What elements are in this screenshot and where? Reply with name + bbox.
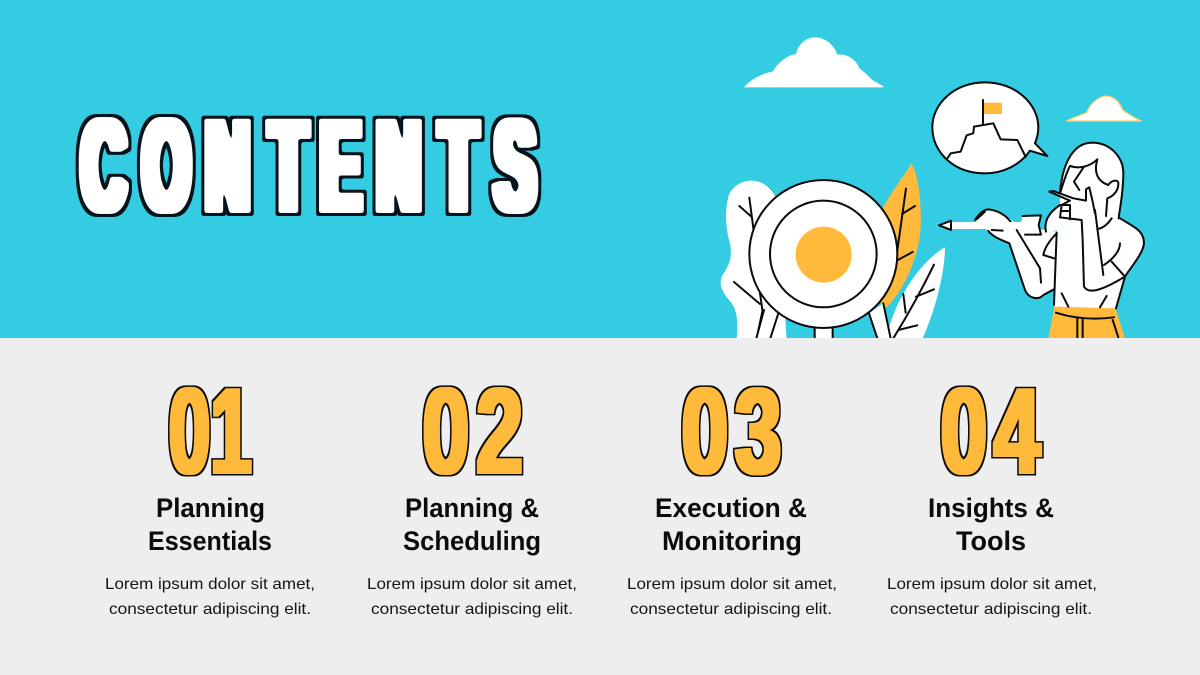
background: sky band <box>0 0 1200 338</box>
illustration <box>721 37 1144 340</box>
skirt details <box>1056 293 1118 337</box>
column 3 <box>627 364 837 618</box>
icon: white leaf <box>887 247 945 340</box>
heading: Tools <box>956 526 1026 556</box>
description: Lorem ipsum dolor sit amet, <box>367 576 577 593</box>
description: consectetur adipiscing elit. <box>890 601 1092 618</box>
number 02: 02 <box>423 364 523 500</box>
icon: thought bubble with mountain and flag <box>932 82 1047 173</box>
icon: small cloud <box>1067 96 1141 121</box>
column 1 <box>105 364 315 618</box>
icon: target <box>749 180 897 328</box>
number 01: 01 <box>169 364 251 500</box>
description: Lorem ipsum dolor sit amet, <box>887 576 1097 593</box>
raised arm and pointing hand <box>1049 187 1125 291</box>
number 03: 03 <box>682 364 781 500</box>
description: consectetur adipiscing elit. <box>109 601 311 618</box>
icon: woman thinking <box>951 143 1144 338</box>
heading: Planning & <box>405 493 539 523</box>
background: grey band <box>0 338 1200 675</box>
body silhouette <box>975 143 1144 308</box>
heading: Essentials <box>148 526 272 556</box>
arm holding dart <box>975 209 1054 298</box>
heading: Monitoring <box>662 526 802 556</box>
heading: Execution & <box>655 493 807 523</box>
icon: large cloud <box>744 37 884 87</box>
number 04: 04 <box>941 364 1040 500</box>
icon: yellow leaf <box>880 164 921 308</box>
skirt <box>1048 303 1125 338</box>
icon: target stand legs <box>756 303 892 340</box>
shoulder and torso lines <box>1043 218 1144 308</box>
column 2 <box>367 364 577 618</box>
column 4 <box>887 364 1097 618</box>
description: Lorem ipsum dolor sit amet, <box>105 576 315 593</box>
icon: dart tip <box>939 221 951 230</box>
heading: Insights & <box>928 493 1054 523</box>
title: CONTENTS <box>82 95 535 238</box>
hair and face lines <box>1045 143 1123 232</box>
description: consectetur adipiscing elit. <box>371 601 573 618</box>
dart <box>951 222 1023 229</box>
heading: Scheduling <box>403 526 541 556</box>
description: consectetur adipiscing elit. <box>630 601 832 618</box>
heading: Planning <box>156 493 265 523</box>
description: Lorem ipsum dolor sit amet, <box>627 576 837 593</box>
icon: white bush <box>721 181 787 340</box>
